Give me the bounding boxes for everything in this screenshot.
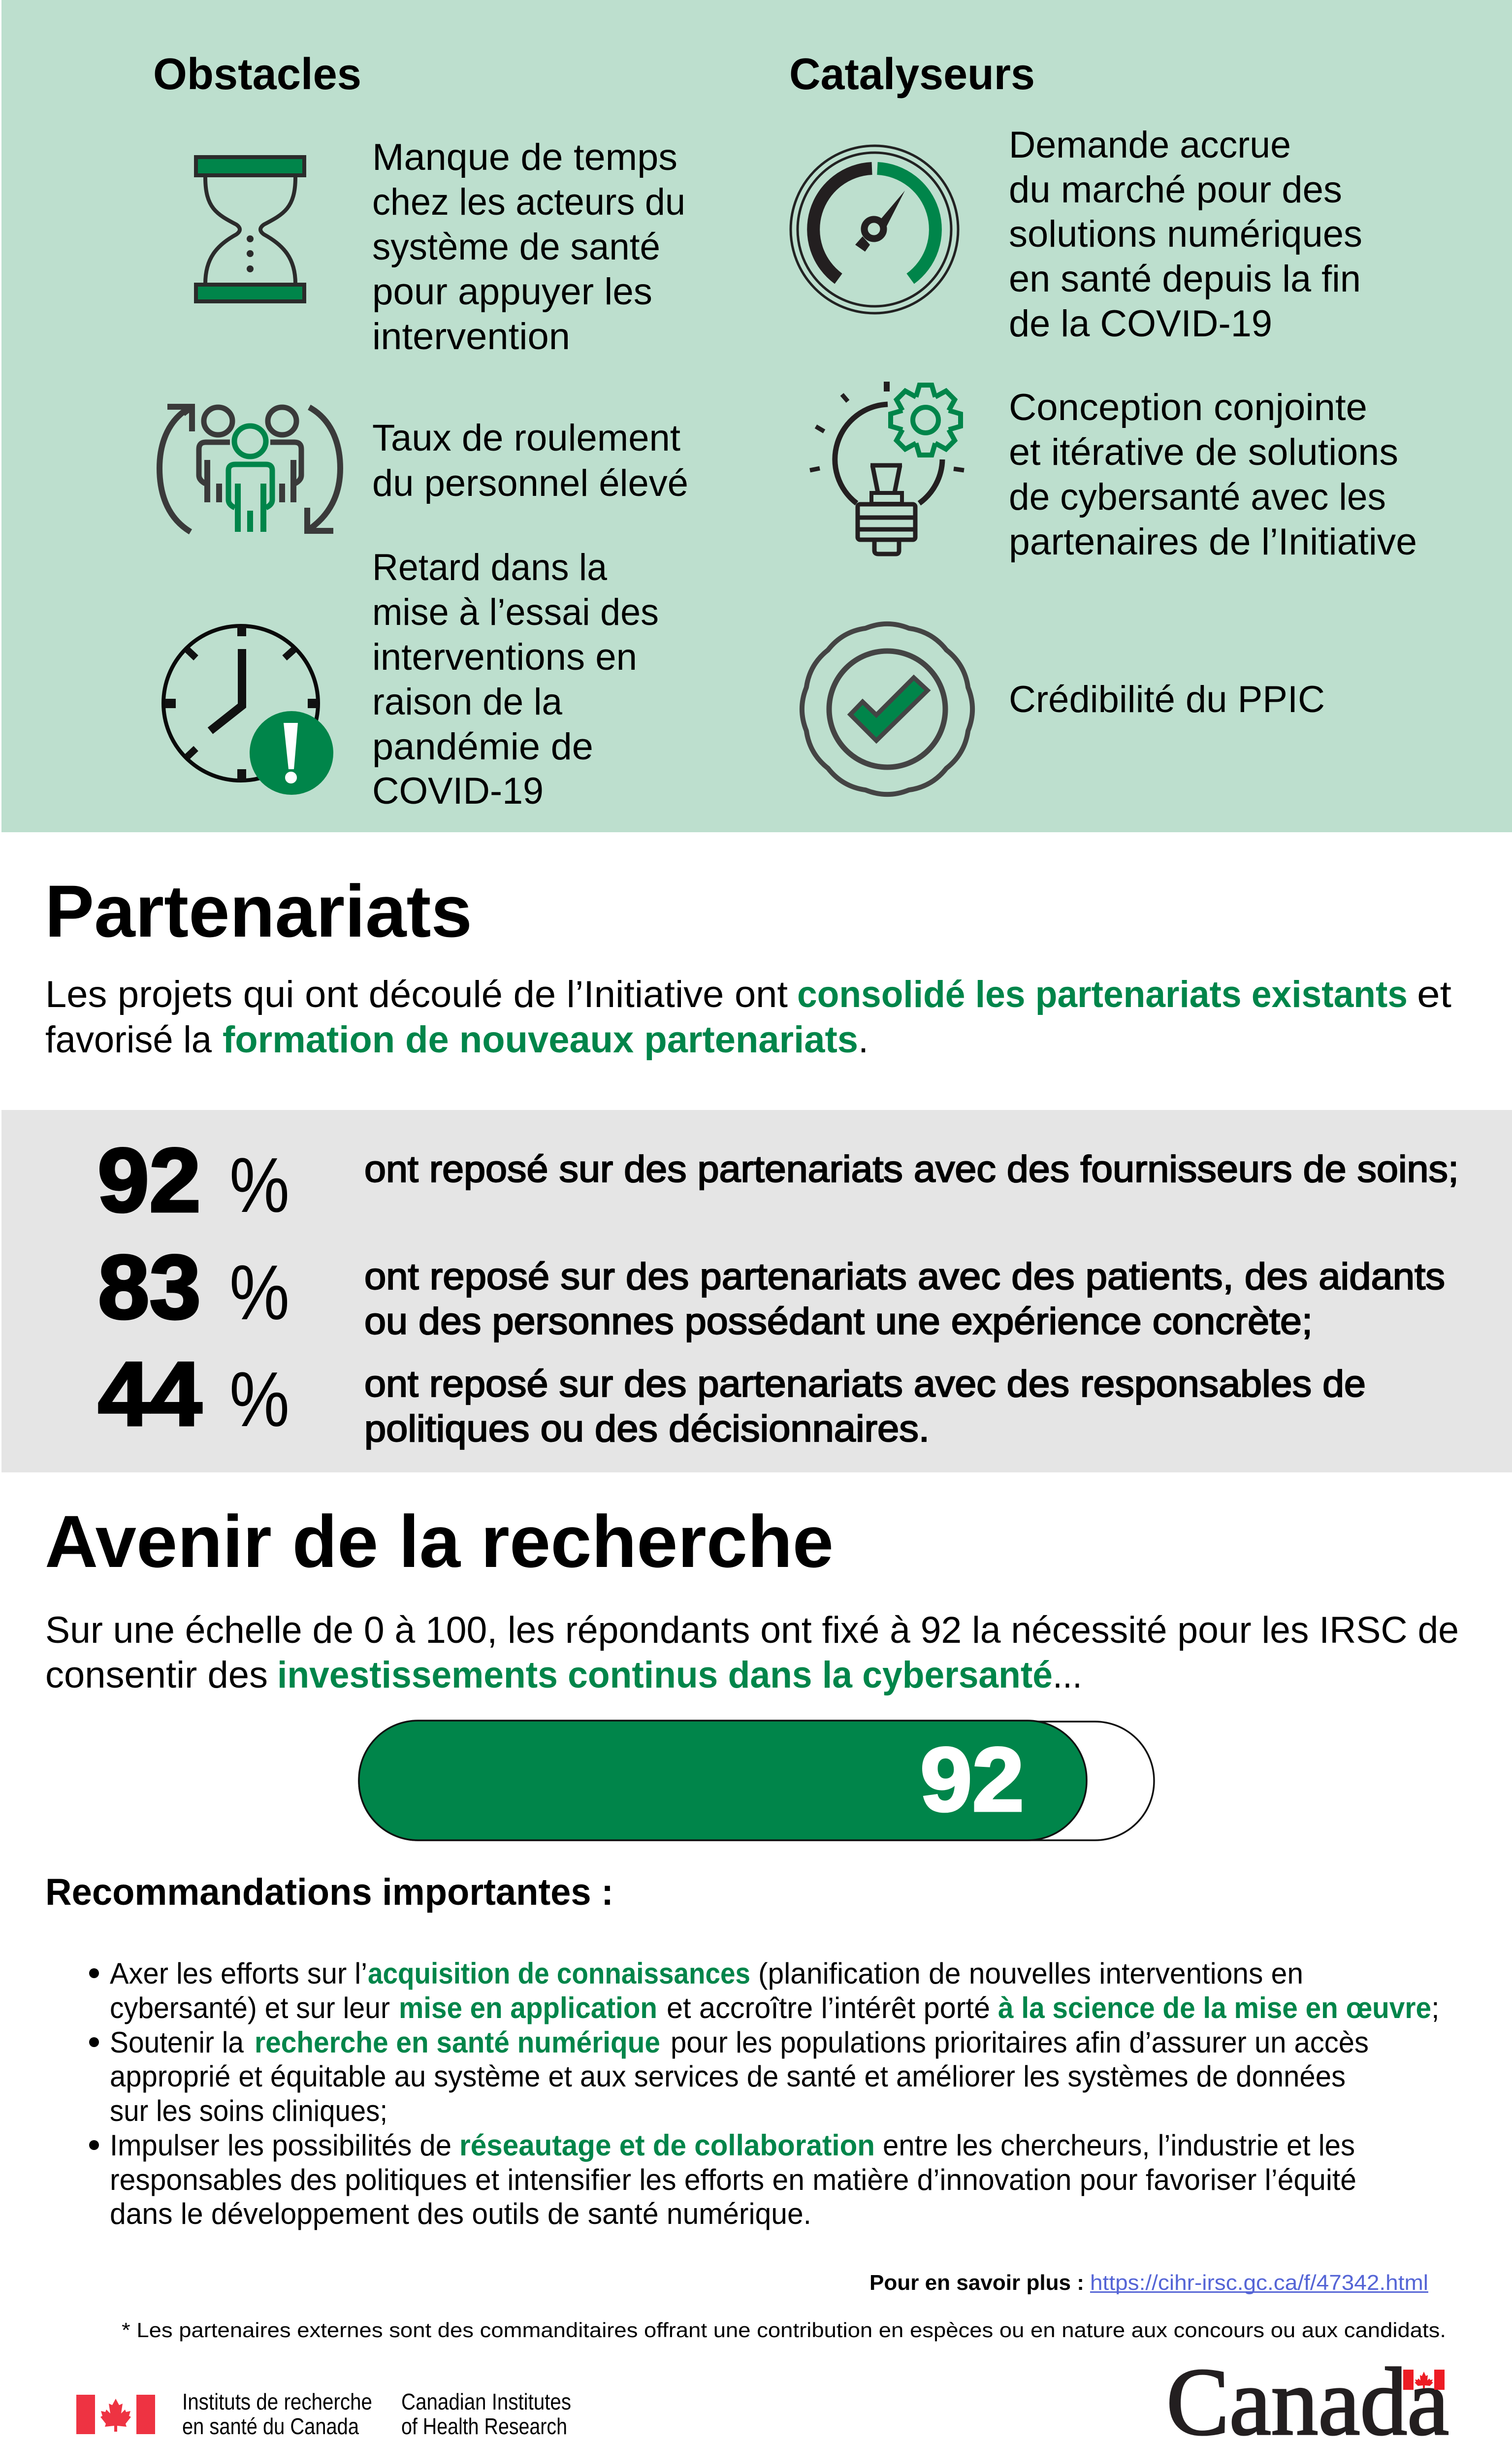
logo: CIHR (76, 2389, 571, 2439)
logo text (182, 2389, 571, 2439)
stat: 83 percent: 83 (98, 1236, 201, 1337)
text block: partnerships intro: formation de nouveaux partenariats (223, 1019, 858, 1061)
text: co-design: Conception conjointe (1009, 387, 1367, 428)
bullet one: (planification de nouvelles interventions en (758, 1957, 1303, 1990)
text block: partnerships intro: . (858, 1019, 869, 1061)
text block: research future intro: ... (1053, 1654, 1082, 1696)
bullet two: pour les populations prioritaires afin d’assurer un accès (671, 2026, 1369, 2059)
bullet three (89, 2129, 1356, 2230)
text: delay due to pandemic: mise à l’essai des (372, 591, 659, 633)
text: staff turnover (372, 417, 688, 504)
icon: staff turnover (160, 407, 340, 532)
heading: Catalyseurs: Catalyseurs (789, 50, 1035, 99)
text: delay due to pandemic: Retard dans la (372, 547, 608, 588)
bullet two (89, 2026, 1369, 2127)
bullet one: et accroître l’intérêt porté (667, 1991, 990, 2024)
logo text: Canadian Institutes (401, 2389, 571, 2414)
icon: wordmark flag (1403, 2370, 1445, 2390)
stat: 44 percent (98, 1343, 1366, 1450)
stat: 44 percent: politiques ou des décisionnaires. (364, 1408, 930, 1450)
icon: light bulb with gear (810, 382, 964, 554)
icon: clock with alert (163, 625, 333, 795)
icon: Canadian flag (76, 2395, 155, 2434)
bar value: 92 (920, 1728, 1024, 1830)
text: delay due to pandemic: raison de la (372, 681, 563, 723)
panel: partnership statistics (1, 1110, 1512, 1472)
text: staff turnover: du personnel élevé (372, 462, 688, 504)
text: market demand (1009, 124, 1362, 345)
text: lack of time: Manque de temps (372, 136, 677, 178)
bullet two: Soutenir la (110, 2026, 244, 2059)
text block: partnerships intro (45, 974, 1451, 1061)
bullet three: dans le développement des outils de santé numérique. (110, 2197, 811, 2230)
stat: 92 percent (97, 1129, 1459, 1231)
list: recommendations (89, 1957, 1440, 2230)
icon: hourglass (196, 157, 304, 301)
text: co-design: de cybersanté avec les (1009, 476, 1386, 518)
text: delay due to pandemic: interventions en (372, 636, 637, 678)
logo text: en santé du Canada (182, 2413, 359, 2439)
stat: 44 percent: % (229, 1356, 290, 1443)
logo text: Instituts de recherche (182, 2389, 372, 2414)
text: co-design: et itérative de solutions (1009, 431, 1398, 473)
heading: Partenariats: Partenariats (45, 870, 472, 952)
text: delay due to pandemic: COVID-19 (372, 770, 544, 812)
bullet two: recherche en santé numérique (255, 2026, 660, 2059)
text: more information link (869, 2271, 1428, 2295)
text: delay due to pandemic (372, 547, 659, 812)
bullet one: cybersanté) et sur leur (110, 1991, 390, 2024)
bullet two: sur les soins cliniques; (110, 2094, 387, 2127)
bullet one: ; (1431, 1991, 1440, 2024)
bullet one: acquisition de connaissances (368, 1957, 750, 1990)
text: credibility: Crédibilité du PPIC (1009, 679, 1325, 720)
text: lack of time: chez les acteurs du (372, 181, 685, 223)
text: delay due to pandemic: pandémie de (372, 726, 593, 768)
icon: gauge (791, 146, 958, 313)
bullet three: responsables des politiques et intensifier les efforts en matière d’innovation pour favoriser l’équité (110, 2163, 1356, 2196)
stat: 83 percent: % (229, 1249, 290, 1336)
text: co-design: partenaires de l’Initiative (1009, 521, 1417, 563)
text block: research future intro: Sur une échelle de 0 à 100, les répondants ont fixé à 92 la nécessité pour les IRSC de (45, 1609, 1459, 1651)
bullet two: approprié et équitable au système et aux services de santé et améliorer les systèmes de données (110, 2060, 1346, 2093)
heading: Obstacles: Obstacles (153, 50, 361, 99)
chart: progress bar 92 (359, 1721, 1154, 1840)
bullet one (89, 1957, 1440, 2024)
panel: obstacles and catalysts (1, 0, 1512, 832)
text block: partnerships intro: favorisé la (45, 1019, 212, 1061)
stat: 83 percent: ou des personnes possédant une expérience concrète; (364, 1301, 1313, 1342)
text block: research future intro: investissements continus dans la cybersanté (277, 1654, 1053, 1696)
text: lack of time: système de santé (372, 226, 660, 268)
bullet three: réseautage et de collaboration (459, 2129, 875, 2162)
text: market demand: de la COVID-19 (1009, 303, 1272, 345)
text: market demand: du marché pour des (1009, 169, 1342, 211)
heading: key recommendations: Recommandations importantes : (45, 1871, 613, 1913)
text: lack of time: pour appuyer les (372, 271, 652, 313)
text: lack of time: intervention (372, 316, 570, 358)
text block: partnerships intro: et (1417, 974, 1451, 1015)
bullet three: Impulser les possibilités de (110, 2129, 451, 2162)
text block: research future intro: consentir des (45, 1654, 268, 1696)
text block: partnerships intro: consolidé les partenariats existants (797, 974, 1408, 1015)
bullet one: à la science de la mise en œuvre (998, 1991, 1431, 2024)
text: market demand: en santé depuis la fin (1009, 258, 1361, 300)
text: lack of time (372, 136, 685, 358)
text: more information link: https://cihr-irsc.gc.ca/f/47342.html (1090, 2271, 1428, 2295)
text block: partnerships intro: Les projets qui ont découlé de l’Initiative ont (45, 974, 788, 1015)
text: market demand: solutions numériques (1009, 213, 1362, 255)
text: staff turnover: Taux de roulement (372, 417, 680, 459)
bullet one: mise en application (399, 1991, 657, 2024)
stat: 83 percent: ont reposé sur des partenariats avec des patients, des aidants (364, 1256, 1445, 1298)
bullet three: entre les chercheurs, l’industrie et les (883, 2129, 1355, 2162)
text block: research future intro (45, 1609, 1459, 1696)
stat: 92 percent: 92 (97, 1129, 201, 1231)
text: more information link: Pour en savoir plus : (869, 2271, 1084, 2295)
logo text: of Health Research (401, 2413, 567, 2439)
stat: 44 percent: 44 (98, 1343, 202, 1444)
stat: 83 percent (98, 1236, 1445, 1342)
stat: 92 percent: % (229, 1142, 290, 1229)
text: co-design (1009, 387, 1417, 563)
text: market demand: Demande accrue (1009, 124, 1291, 166)
stat: 44 percent: ont reposé sur des partenariats avec des responsables de (364, 1363, 1366, 1405)
bullet one: Axer les efforts sur l’ (110, 1957, 367, 1990)
icon: credibility badge (802, 624, 972, 794)
footnote: * Les partenaires externes sont des commanditaires offrant une contribution en espèces ou en nature aux concours ou aux candidats. (122, 2318, 1446, 2342)
stat: 92 percent: ont reposé sur des partenariats avec des fournisseurs de soins; (364, 1148, 1459, 1190)
heading: Avenir de la recherche: Avenir de la recherche (45, 1500, 834, 1583)
